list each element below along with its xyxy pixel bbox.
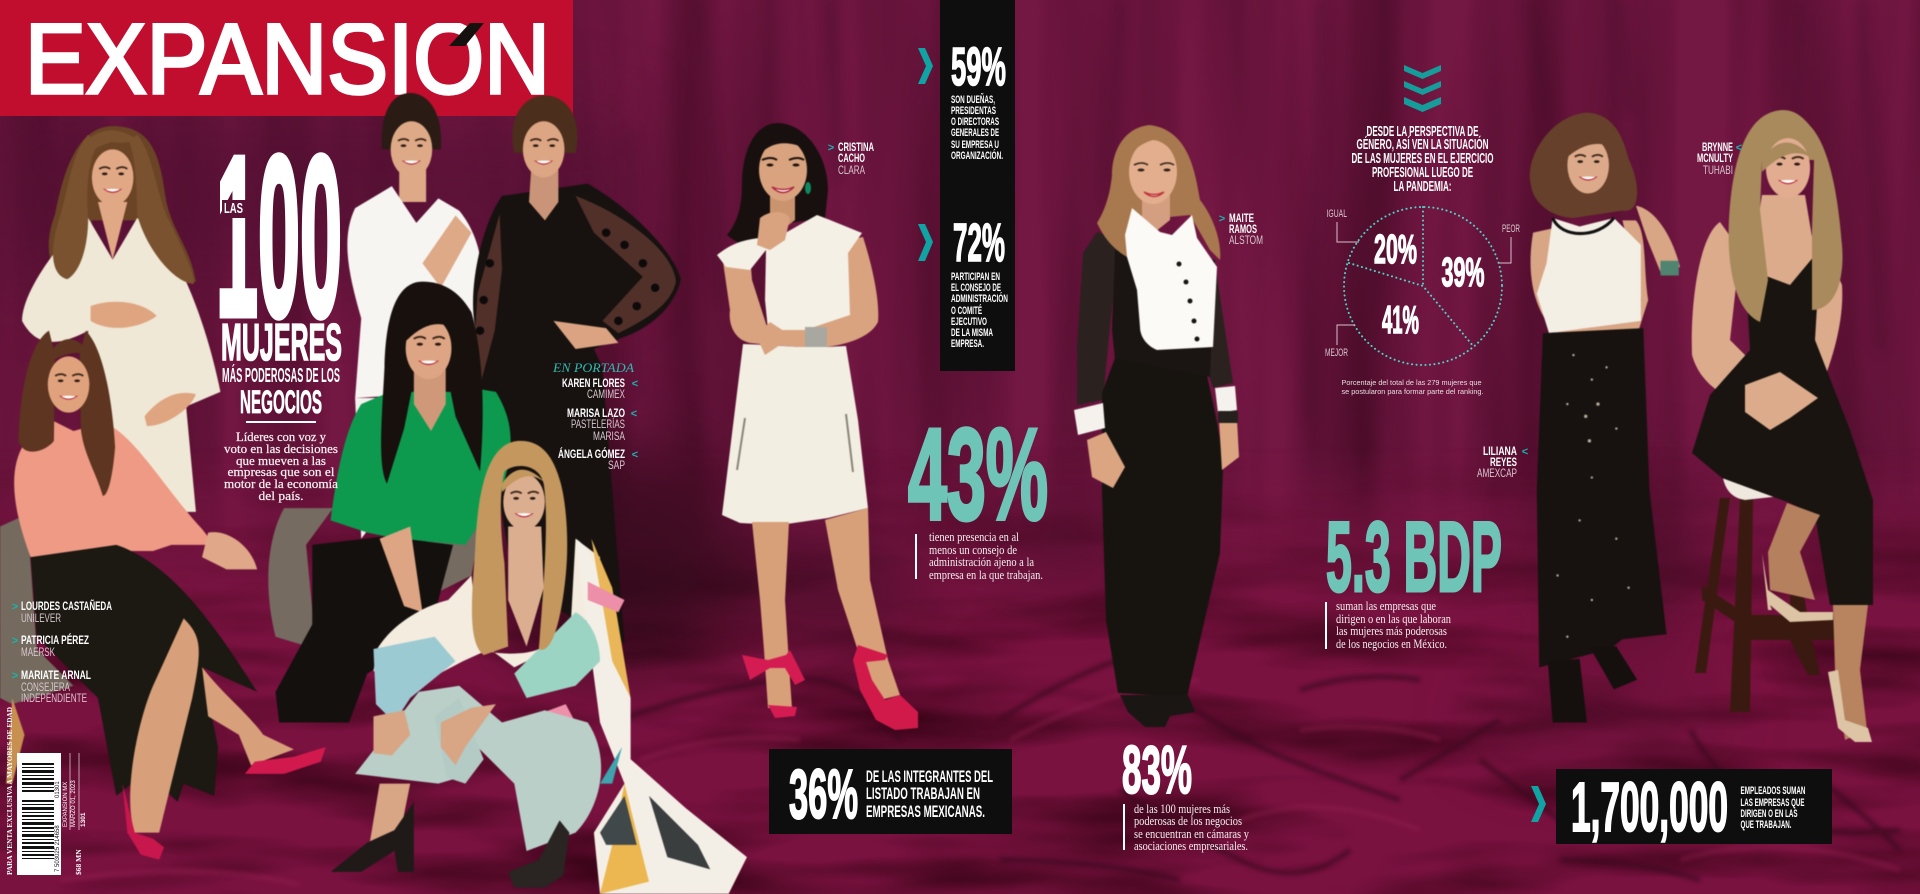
- chart label leaders: [1337, 222, 1511, 345]
- zipper details: [737, 414, 853, 472]
- barcode and issue details: 1301: [80, 812, 87, 827]
- name label: Maite Ramos: ALSTOM: [1229, 233, 1263, 247]
- cover title: Las 100 mujeres: NEGOCIOS: [240, 384, 322, 420]
- chart footnote: se postularon para formar parte del ranking.: [1342, 387, 1484, 396]
- black box: 36% stat: EMPRESAS MEXICANAS.: [866, 802, 985, 821]
- en portada name labels: EN PORTADA: [552, 360, 634, 375]
- stat 59%: 59%: [951, 37, 1006, 97]
- black box: 1,700,000 employees: 1,700,000: [1571, 768, 1728, 846]
- label: igual: IGUAL: [1326, 208, 1347, 220]
- name label: Cristina Cacho: >: [828, 142, 834, 154]
- heading: gender perspective: DESDE LA PERSPECTIVA DE: [1366, 124, 1479, 140]
- wooden stool: [1695, 498, 1837, 712]
- hair: [1097, 125, 1220, 260]
- stat 72%: ADMINISTRACIÓN: [951, 292, 1008, 305]
- stat: 5.3 BDP: de los negocios en México.: [1336, 636, 1447, 651]
- dotted circle and slice dividers: [1344, 207, 1502, 365]
- stat 72%: [951, 213, 1008, 350]
- text: MÁS PODEROSAS DE LOS: [222, 364, 340, 387]
- black box: 1,700,000 employees: EMPLEADOS SUMAN: [1740, 785, 1806, 797]
- black box: 36% stat: LISTADO TRABAJAN EN: [866, 784, 980, 803]
- cover subtitle: [224, 429, 338, 503]
- en portada name labels: <: [631, 408, 637, 420]
- chart footnote: Porcentaje del total de las 279 mujeres que: [1342, 378, 1482, 387]
- name label: Brynne McNulty: BRYNNE: [1702, 140, 1733, 154]
- white stool seat: [1722, 472, 1790, 500]
- arms: [1692, 220, 1842, 401]
- en portada name labels: KAREN FLORES: [562, 376, 625, 390]
- chest and neck: [1750, 195, 1815, 285]
- stat 72%: EL CONSEJO DE: [951, 282, 1001, 294]
- cover subtitle: empresas que son el: [228, 464, 335, 479]
- name label: Brynne McNulty: TUHABI: [1703, 163, 1733, 177]
- en portada name labels: SAP: [608, 458, 625, 472]
- barcode and issue details: [5, 706, 87, 875]
- photo: seated woman on stool, Brynne McNulty: [1692, 110, 1873, 742]
- stat 59%: GENERALES DE: [951, 127, 999, 139]
- left name labels: MAERSK: [21, 645, 55, 659]
- pie chart: dotted outline with three slices: [1325, 207, 1520, 365]
- face: [1766, 138, 1810, 198]
- stat 72%: EMPRESA.: [951, 338, 984, 350]
- name label: Maite Ramos: MAITE: [1229, 211, 1254, 225]
- woman in cream dress: [22, 126, 220, 512]
- left name labels: [12, 598, 112, 705]
- cover subtitle: Líderes con voz y: [236, 429, 326, 444]
- stat: 43%: empresa en la que trabajan.: [929, 567, 1043, 582]
- silver cuff: [805, 327, 827, 347]
- raised lower leg and heel: [1768, 503, 1820, 600]
- heading: gender perspective: PROFESIONAL LUEGO DE: [1372, 165, 1473, 181]
- name label: Liliana Reyes: [1477, 444, 1528, 480]
- black box: 1,700,000 employees: QUE TRABAJAN.: [1740, 819, 1792, 831]
- name label: Cristina Cacho: CLARA: [838, 163, 865, 177]
- stat: 83%: poderosas de los negocios: [1134, 813, 1242, 828]
- taupe chairs: [268, 508, 480, 649]
- black dress and lap: [1692, 255, 1873, 605]
- stat: 5.3 BDP: las mujeres más poderosas: [1336, 623, 1447, 638]
- label: peor: PEOR: [1502, 223, 1520, 235]
- chevron arrow: [918, 48, 933, 84]
- black torso: [1112, 250, 1215, 377]
- name label: Liliana Reyes: <: [1522, 446, 1528, 458]
- text: MUJERES: [221, 314, 342, 372]
- cover subtitle: voto en las decisiones: [224, 441, 338, 456]
- icon: triple down chevrons: [1404, 65, 1441, 112]
- left name labels: >: [12, 601, 18, 613]
- name label: Brynne McNulty: MCNULTY: [1697, 151, 1733, 165]
- chevron arrow: employees: [1531, 786, 1546, 822]
- label: mejor: MEJOR: [1325, 347, 1348, 359]
- en portada name labels: CAMIMEX: [587, 387, 625, 401]
- cover subtitle: que mueven a las: [236, 453, 326, 468]
- heading: gender perspective: LA PANDEMIA:: [1394, 179, 1452, 195]
- name label: Maite Ramos: RAMOS: [1229, 222, 1257, 236]
- black box: 1,700,000 employees: LAS EMPRESAS QUE: [1740, 797, 1804, 809]
- stat 59%: O DIRECTORAS: [951, 116, 999, 128]
- cover subtitle: del país.: [258, 488, 304, 503]
- masthead: red banner with Expansión logo: EXPANSIÓN: [25, 3, 550, 115]
- woman crouching: long blonde hair and patterned kimono: [331, 441, 747, 894]
- stat: 83%: 83%: [1122, 732, 1192, 808]
- barcode and issue details: $68 MN: [74, 849, 83, 875]
- photo: cover group of six women: [0, 93, 747, 894]
- stat 72%: DE LA MISMA: [951, 327, 993, 339]
- legs: [752, 508, 900, 708]
- left name labels: >: [12, 670, 18, 682]
- white bib shirt: [1125, 208, 1217, 350]
- stat 59%: SON DUEÑAS,: [951, 93, 995, 106]
- barcode and issue details: MARZO 01, 2023: [71, 780, 77, 827]
- left name labels: PATRICIA PÉREZ: [21, 632, 89, 647]
- left name labels: MARIATE ARNAL: [21, 668, 91, 682]
- heading: gender perspective: GÉNERO, ASÍ VEN LA SITUACIÓN: [1356, 135, 1488, 153]
- stat 59%: SU EMPRESA U: [951, 139, 999, 151]
- stat 59%: ORGANIZACIÓN.: [951, 149, 1003, 162]
- woman in salmon blouse and black skirt: [0, 331, 326, 860]
- cover subtitle: motor de la economía: [224, 476, 338, 491]
- name label: Liliana Reyes: REYES: [1490, 455, 1517, 469]
- stat 72%: 72%: [953, 213, 1005, 273]
- en portada name labels: [552, 360, 638, 472]
- name label: Liliana Reyes: LILIANA: [1483, 444, 1517, 458]
- left name labels: CONSEJERA: [21, 680, 70, 694]
- en portada name labels: MARISA: [593, 429, 625, 443]
- arms: [723, 237, 878, 347]
- hair: [727, 123, 828, 248]
- stat: 43%: [908, 401, 1048, 582]
- stat: 43%: tienen presencia en al: [929, 529, 1019, 544]
- black column: 59% and 72% stats: [918, 0, 1015, 371]
- photo: woman in white dress, Cristina Cacho: [717, 123, 918, 730]
- stat 72%: EJECUTIVO: [951, 316, 987, 328]
- name label: Brynne McNulty: <: [1736, 142, 1742, 154]
- pie chart: dotted outline with three slices: 41%: [1382, 299, 1419, 342]
- name label: Cristina Cacho: [828, 140, 874, 177]
- long wavy blonde hair: [1729, 110, 1843, 322]
- stat: 83%: de las 100 mujeres más: [1134, 801, 1230, 816]
- standing lower leg and heel: [1833, 605, 1868, 740]
- slice value: igual 20%: 20%: [1374, 226, 1417, 272]
- text: 100: [216, 110, 342, 364]
- left name labels: LOURDES CASTAÑEDA: [21, 598, 112, 613]
- left name labels: UNILEVER: [21, 611, 61, 625]
- barcode and issue details: EXPANSION MX: [63, 782, 69, 827]
- black box: 1,700,000 employees: DIRIGEN O EN LAS: [1740, 808, 1798, 820]
- heading: gender perspective: [1352, 124, 1494, 195]
- stat: 83%: se encuentran en cámaras y: [1134, 826, 1249, 841]
- woman in white shirt: [347, 93, 482, 539]
- barcode and issue details: 7 503025 214658: [55, 825, 61, 872]
- trousers: [1102, 358, 1223, 697]
- name label: Cristina Cacho: CRISTINA: [838, 140, 874, 154]
- cover title: Las 100 mujeres: LAS: [224, 200, 243, 217]
- stat 72%: O COMITÉ: [951, 304, 982, 317]
- photo: woman with sequin skirt, Liliana Reyes: [1530, 113, 1680, 722]
- heading: gender perspective: DE LAS MUJERES EN EL EJERCICIO: [1352, 151, 1494, 167]
- woman in green blouse: [276, 282, 511, 722]
- slice value: peor 39%: 39%: [1442, 249, 1484, 295]
- en portada name labels: <: [632, 378, 638, 390]
- black box: 36% stat: DE LAS INTEGRANTES DEL: [866, 767, 993, 786]
- face: [770, 195, 795, 232]
- stat 59%: [951, 37, 1006, 162]
- left name labels: >: [12, 635, 18, 647]
- stat: 5.3 BDP: [1325, 501, 1502, 651]
- name label: Liliana Reyes: AMEXCAP: [1477, 466, 1517, 480]
- chart footnote: [1342, 378, 1484, 396]
- pink bow sandals: [742, 650, 805, 718]
- sheer black sleeves: [1077, 232, 1120, 405]
- en portada name labels: MARISA LAZO: [567, 406, 625, 420]
- stat: 43%: administración ajeno a la: [929, 554, 1034, 569]
- chevron arrow: [918, 224, 933, 261]
- name label: Brynne McNulty: [1697, 140, 1742, 177]
- raised hand and crossed hand: [757, 212, 790, 250]
- stat: 5.3 BDP: dirigen o en las que laboran: [1336, 611, 1451, 626]
- white dress: [717, 215, 862, 330]
- shoes: [1120, 695, 1195, 727]
- face: [1142, 195, 1170, 232]
- name label: Maite Ramos: >: [1219, 213, 1225, 225]
- barcode and issue details: 01301: [55, 781, 61, 798]
- black box: 36% stat: [769, 749, 1012, 834]
- stat: 43%: menos un consejo de: [929, 542, 1017, 557]
- stat: 43%: 43%: [908, 401, 1048, 547]
- text: 5.3 BDP: [1326, 501, 1502, 612]
- en portada name labels: ÁNGELA GÓMEZ: [558, 446, 625, 461]
- stat: 83%: asociaciones empresariales.: [1134, 838, 1248, 853]
- name label: Cristina Cacho: CACHO: [838, 151, 865, 165]
- en portada name labels: PASTELERÍAS: [571, 416, 625, 431]
- stat: 5.3 BDP: suman las empresas que: [1336, 598, 1436, 613]
- woman in black polka dot dress: [471, 96, 681, 643]
- en portada name labels: <: [632, 449, 638, 461]
- clasped hands: [1745, 372, 1818, 430]
- photo: woman in black and white tuxedo, Maite Ramos: [1074, 125, 1239, 727]
- cover title: Las 100 mujeres: [216, 110, 342, 423]
- stat 72%: PARTICIPAN EN: [951, 271, 1000, 283]
- black box: 36% stat: 36%: [789, 755, 858, 833]
- shirt cuffs: [1074, 403, 1105, 435]
- left name labels: INDEPENDIENTE: [21, 691, 87, 705]
- stat 59%: PRESIDENTAS: [951, 105, 996, 117]
- hands: [1087, 432, 1125, 488]
- barcode and issue details: PARA VENTA EXCLUSIVA A MAYORES DE EDAD: [5, 706, 14, 875]
- name label: Maite Ramos: [1219, 211, 1263, 247]
- stat: 83%: [1122, 732, 1249, 853]
